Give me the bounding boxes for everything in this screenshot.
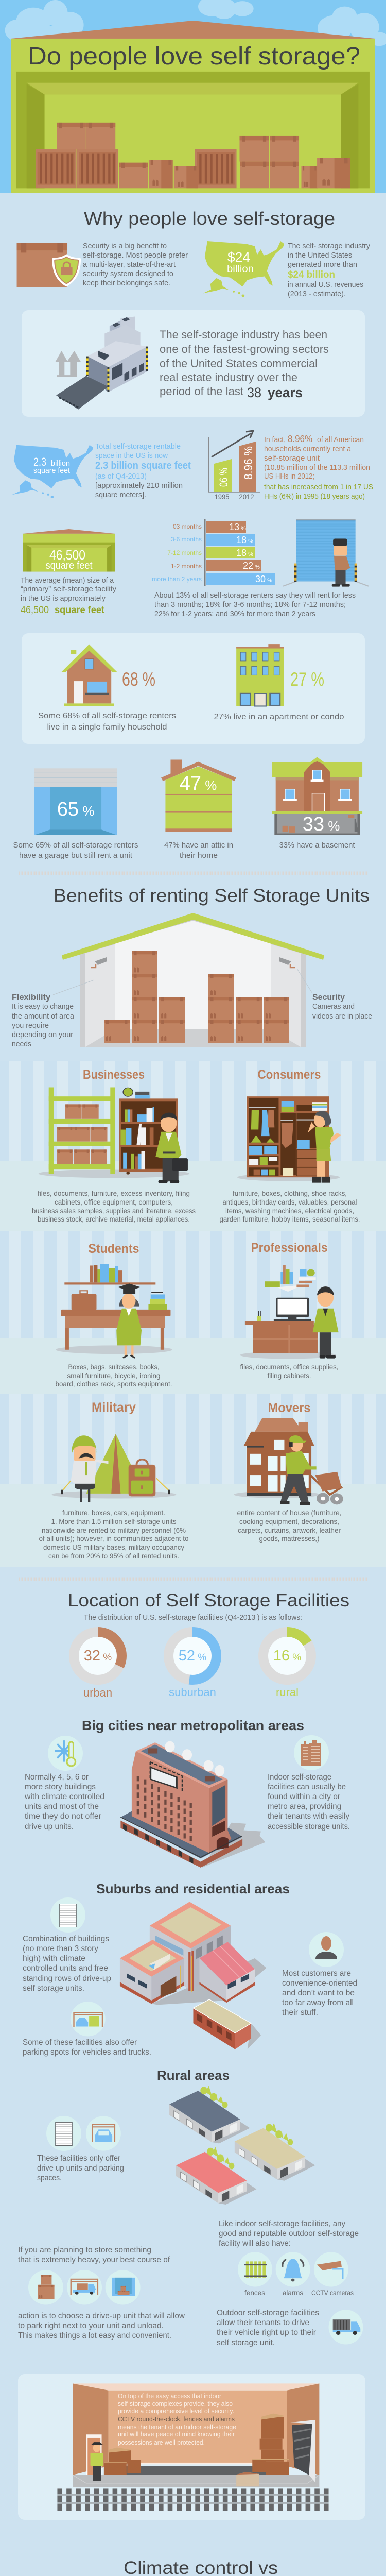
text: drive-up recommendation: action is to choose a drive-up unit that will allow [18,2312,185,2320]
icon: isometric loading facility [56,317,147,410]
icons: fences, alarms, cameras [238,2252,348,2287]
heading: professionals: Professionals [251,1241,327,1255]
text: big cities right: facilities can usually be [268,1783,346,1791]
text: industry revenue: (2013 - estimate). [288,290,346,298]
text: consumers list [219,1189,360,1223]
text: flexibility: you require [12,1022,49,1030]
icon: garage 65% [34,768,117,835]
text: indoor security: provide a comprehensive level of security. [118,2407,234,2415]
icon: roller door [50,1897,85,1933]
icon: house with basement 33% [272,757,362,835]
text: rental durations: than 3 months; 18% for 3-6 months; 18% for 7-12 months; [154,601,346,609]
text: businesses list: business sales samples, supplies and literature, excess [32,1207,196,1215]
icon: blue US map 2.3 billion: billion [51,459,70,468]
illustration: suburban buildings [120,1902,267,2049]
bar chart: households 1995 vs 2012: 1995 [214,493,230,501]
icons: heavy items, truck, unit [28,2270,141,2304]
text: military list: domestic US military bases, military occupancy [43,1543,184,1551]
icon: up arrows [56,351,81,377]
text: outdoor tenants [217,2309,319,2347]
icon: blue US map 2.3 billion [12,445,93,498]
text: industry revenue: in the United States [288,251,352,260]
illustration: rural buildings [169,2086,315,2205]
text: household captions [38,711,344,732]
bar chart: rental duration: 18 % [236,548,253,558]
text: industry revenue [288,242,371,298]
text: outdoor tenants: Outdoor self-storage facilities [217,2309,319,2317]
text: professionals list: files, documents, office supplies, [240,1363,339,1371]
bar chart: rental duration: 18 % [236,535,253,545]
text: heavy items [18,2246,170,2264]
text: outdoor features intro: good and reputable outdoor self-storage [219,2229,359,2238]
text: big cities left: drive up units. [25,1822,74,1831]
text: fastest-growing [160,328,329,400]
text: feature labels: alarms [283,2289,303,2297]
text: outdoor features intro: Like indoor self-storage facilities, any [219,2219,345,2228]
text: 8.96% of households: that has increased from 1 in 17 US [264,483,373,492]
text: suburbs left: (no more than 3 story [23,1944,98,1953]
text: rentable space: square meters]. [95,491,146,499]
bar chart: rental duration: 1-2 months [171,563,202,570]
icon: US map with $24 billion: billion [227,264,254,275]
boxes in the doorway [36,123,350,188]
text: rentable space: Total self-storage rentable [95,443,181,451]
donut: urban 32%: urban [83,1686,112,1699]
text: 8.96% of households: households currently rent a [264,445,352,453]
text: industry revenue: $24 billion [288,269,335,280]
text: suburbs left: Combination of buildings [23,1935,109,1943]
donut: urban 32% [74,1632,121,1699]
text: flexibility: the amount of area [12,1012,75,1021]
donut: suburban 52% [169,1632,216,1699]
text: security: keep their belongings safe. [83,279,170,287]
donut: suburban 52%: suburban [169,1686,216,1699]
text: rural left: These facilities only offer [37,2154,120,2163]
figure: 68%: 68 % [122,669,155,690]
text: industry revenue: The self- storage industry [288,242,371,250]
heading: movers: Movers [268,1401,311,1415]
text: outdoor tenants: their vehicle right up to their [217,2328,316,2337]
text: indoor security: unit will have peace of mind knowing their [118,2430,235,2438]
text: outdoor features intro [219,2219,359,2248]
icon: security cameras [91,957,295,968]
text: suburbs right [282,1969,357,2017]
bar chart: households 1995 vs 2012: 06 % [217,468,230,487]
text: big cities left: more story buildings [25,1783,96,1791]
bar chart: households 1995 vs 2012 [209,431,260,501]
text: flexibility: needs [12,1040,31,1048]
heading: suburbs: Suburbs and residential areas [96,1881,290,1896]
text: students list: Boxes, bags, suitcases, books, [68,1363,160,1371]
icon: apartment block [236,644,284,706]
heading: students: Students [89,1242,139,1256]
text: outdoor features intro: facility will also have: [219,2239,291,2248]
icon: small warehouse 46,500: 46,500 [49,547,85,563]
panel: household type [22,633,365,744]
text: security: a multi-layer, state-of-the-art [83,261,176,269]
text: security: Security is a big benefit to [83,242,167,250]
text: average facility size: “primary” self-storage facility [21,585,117,594]
text: military list: furniture, boxes, cars, equipment. [62,1509,165,1517]
heading: military: Military [92,1400,136,1415]
text: outdoor tenants: allow their tenants to drive [217,2318,309,2327]
text: big cities right: accessible storage units. [268,1822,350,1831]
icon: small warehouse 46,500: square feet [45,560,93,571]
text: consumers list: furniture, boxes, clothing, shoe racks, [233,1189,347,1197]
text: 8.96% of households: (10.85 million of the 113.3 million [264,464,370,472]
text: suburbs parking [23,2038,151,2057]
icon: car in drive-up unit [86,2116,121,2151]
text: storage captions [13,841,355,860]
illustration: consumers wardrobe and woman [237,1096,341,1183]
text: feature labels: CCTV cameras [311,2289,354,2297]
text: movers list: cooking equipment, decorations, [239,1517,339,1526]
text: indoor security: On top of the easy access that indoor [118,2392,222,2400]
text: heavy items: If you are planning to store something [18,2246,151,2255]
text: household captions: 27% live in an apartment or condo [214,713,344,721]
text: storage captions: have a garage but still rent a unit [19,851,133,860]
text: security: Cameras and [312,1003,355,1011]
donut: rural 16%: rural [276,1686,299,1699]
icon: house with basement 33%: 33 % [303,814,340,835]
bar chart: rental duration: more than 2 years [152,575,202,583]
donut: rural 16%: 16 % [273,1648,301,1664]
text: indoor security [118,2392,236,2446]
icon: climate snowflake [48,1736,83,1771]
text: fastest-growing: The self-storage industry has been [160,328,327,341]
icon: car and truck parking [71,2002,106,2036]
text: storage captions: 47% have an attic in [164,841,233,850]
text: indoor security: self-storage complexes provide, they also [118,2400,233,2408]
text: big cities left: Normally 4, 5, 6 or [25,1773,89,1782]
icon: truck [329,2310,363,2345]
text: military list: can be from 20% to 95% of all rented units. [48,1552,179,1560]
text: suburbs right: their stuff. [282,2008,318,2017]
text: professionals list: filing cabinets. [268,1371,311,1380]
striped wall bands [0,1061,386,1567]
title: Do people love self storage? [28,43,360,70]
panel: indoor security room [18,2374,365,2520]
panel: fastest-growing sector [22,310,365,417]
building [11,39,375,193]
text: flexibility: Flexibility [12,992,51,1002]
bar chart: households 1995 vs 2012: 8.96 % [242,446,255,480]
text: suburbs right: convenience-oriented [282,1979,357,1988]
text: movers list: goods, mattresses,) [259,1534,319,1543]
text: big cities right: found within a city or [268,1792,340,1801]
text: fastest-growing: 38 [247,385,261,400]
clouds [5,0,386,46]
text: outdoor tenants: self storage unit. [217,2338,275,2347]
text: suburbs left: high) with climate [23,1954,85,1963]
text: rural left: drive up units and parking [37,2164,124,2173]
text: household captions: Some 68% of all self-storage renters [38,711,176,720]
text: businesses list: business stock, archive material, metal appliances. [38,1215,190,1223]
text: fastest-growing: one of the fastest-growing sectors [160,343,329,355]
roof [11,21,375,39]
text: rental durations: About 13% of all self-storage renters say they will rent for less [154,591,356,600]
text: storage captions: 33% have a basement [279,841,355,850]
donut: rural 16% [264,1632,311,1699]
heading: rural: Rural areas [157,2067,230,2083]
text: rentable space: 2.3 billion square feet [95,460,191,471]
text: 8.96% of households [264,434,373,501]
text: big cities left: with climate controlled [24,1792,104,1801]
text: heavy items: that is extremely heavy, your best course of [18,2256,170,2264]
illustration: room with guard and crates [57,2383,329,2511]
text: movers list [237,1509,342,1543]
text: big cities left [24,1773,104,1831]
text: fastest-growing: real estate industry over the [160,371,297,384]
heading: businesses: Businesses [83,1067,145,1082]
text: suburbs right: too far away from all [282,1998,354,2007]
illustration: professional at desk [240,1265,339,1359]
text: suburbs left: self storage units. [23,1984,84,1993]
icon: attic house 47%: 47 % [180,773,217,794]
text: flexibility: It is easy to change [12,1003,74,1011]
text: rural left: spaces. [37,2174,62,2182]
text: security: self-storage. Most people prefer [83,251,188,260]
bar chart: rental duration: 3-6 months [171,536,202,543]
donut: suburban 52%: 52 % [179,1648,206,1664]
text: professionals list [240,1363,339,1380]
text: businesses list: files, documents, furniture, excess inventory, filing [38,1189,190,1197]
text: rentable space [95,443,191,499]
text: 8.96% of households: HHs (6%) in 1995 (18 years ago) [264,493,365,501]
bar chart: rental duration: 13 % [229,522,246,532]
text: average facility size: The average (mean) size of a [21,577,114,585]
text: suburbs left [23,1935,111,1993]
text: students list [56,1363,172,1388]
text: storage captions: their home [180,851,218,860]
text: 8.96% of households: 8.96% [288,434,312,444]
text: suburbs left: standing rows of drive-up [23,1974,111,1983]
text: drive-up recommendation: to park right next to your unit and unload. [18,2321,164,2330]
text: flexibility: depending on your [12,1031,73,1039]
text: students list: small furniture, bicycle, ironing [67,1371,161,1380]
icon: blue US map 2.3 billion: 2.3 [33,455,46,468]
text: indoor security: means the tenant of an Indoor self-storage [118,2423,236,2431]
text: indoor security: possessions are well protected. [118,2438,205,2446]
text: movers list: entire content of house (furniture, [237,1509,342,1517]
text: big cities right: their tenants with easily [268,1812,349,1821]
text: indoor security: CCTV round-the-clock, fences and alarms [118,2415,235,2423]
text: military list [39,1509,189,1560]
heading: benefits: Benefits of renting Self Storage Units [54,886,370,906]
illustration: isometric city building [120,1741,266,1868]
bar chart: rental duration: 7-12 months [167,549,202,556]
icon: roller door [46,2116,81,2151]
text: suburbs right: and don’t want to be [282,1989,355,1997]
text: average facility size [21,577,117,616]
heading: why people love: Why people love self-storage [84,209,335,229]
icon: single family house [62,645,117,706]
text: storage captions: Some 65% of all self-storage renters [13,841,138,850]
text: businesses list: cabinets, office equipment, computers, [55,1198,173,1206]
text: suburbs parking: Some of these facilities also offer [23,2038,137,2047]
text: household captions: live in a single family household [47,723,167,732]
text: drive-up recommendation: This makes things a lot easy and convenient. [18,2331,171,2340]
text: security [312,992,372,1021]
donut: urban 32%: 32 % [84,1648,112,1664]
text: security [83,242,188,287]
text: 8.96% of households: of all American [317,436,364,444]
text: big cities left: time they do not offer [25,1812,101,1821]
text: feature labels [244,2289,354,2297]
text: security: security system designed to [83,270,173,278]
text: drive-up recommendation [18,2312,185,2340]
text: 8.96% of households: self-storage unit [264,454,320,463]
text: military list: 1. More than 1.5 million self-storage units [51,1517,176,1526]
text: rental durations [154,591,356,618]
illustration: mover with house and dolly [234,1418,343,1505]
text: suburbs parking: parking spots for vehicles and trucks. [23,2048,151,2057]
icon: box with shield [17,243,81,287]
hero: warehouse with title [0,0,386,193]
text: distribution intro: The distribution of U.S. self-storage facilities (Q4-2013 ) is as follows: [84,1614,302,1622]
icon: US map with $24 billion [203,241,284,297]
bar chart: rental duration: 22 % [243,561,260,571]
icon: attic house 47% [162,759,235,832]
illustration: student at desk [56,1264,172,1358]
text: big cities right: Indoor self-storage [268,1773,331,1782]
icon: garage 65%: 65 % [57,799,94,820]
text: security: Security [312,992,345,1002]
text: big cities left: units and most of the [25,1802,99,1811]
text: rural left [37,2154,124,2182]
text: big cities right [268,1773,350,1831]
figure: 27%: 27 % [290,669,324,690]
heading: location: Location of Self Storage Facilities [68,1590,349,1611]
text: average facility size: 46,500 [21,605,49,616]
icon: US map with $24 billion: $24 [227,249,250,265]
bar chart: rental duration: 03 months [173,523,202,530]
text: fastest-growing: of the United States commercial [160,357,318,370]
text: 8.96% of households: US HHs in 2012; [264,472,314,481]
illustration: businesses shelf, bookcase and man [39,1087,189,1183]
text: consumers list: items, washing machines, electrical goods, [225,1207,354,1215]
text: industry revenue: in annual U.S. revenues [288,281,363,289]
text: movers list: carpets, curtains, artwork, leather [238,1526,341,1534]
text: average facility size: square feet [55,605,105,616]
text: flexibility [12,992,75,1048]
text: suburbs right: Most customers are [282,1969,351,1978]
text: big cities right: metro area, providing [268,1802,341,1811]
text: security: videos are in place [312,1012,372,1021]
text: rentable space: (as of Q4-2013) [95,472,147,481]
text: military list: nationwide are rented to military personnel (6% [42,1526,186,1534]
text: students list: board, clothes rack, sports equipment. [56,1380,172,1388]
text: businesses list [32,1189,196,1223]
text: rentable space: [approximately 210 million [95,482,183,490]
text: rentable space: space in the US is now [95,452,168,460]
heading: consumers: Consumers [257,1067,321,1082]
text: consumers list: garden furniture, hobby items, seasonal items. [219,1215,360,1223]
text: military list: of all units); however, in communities adjacent to [39,1534,189,1543]
icon: small warehouse 46,500 [23,529,115,572]
icon: blue US map 2.3 billion: square feet [33,466,71,475]
text: feature labels: fences [244,2289,265,2297]
bar chart: rental duration: 30 % [255,574,272,584]
icon: customer person [309,1932,344,1967]
text: average facility size: in the US is approximately [21,595,106,603]
text: consumers list: antiques, birthday cards, valuables, personal [222,1198,357,1206]
text: 8.96% of households: In fact, [264,436,286,444]
bar chart: households 1995 vs 2012: 2012 [239,493,254,501]
icon: man at roller door [283,520,369,587]
text: fastest-growing: period of the last [160,385,243,398]
illustration: storage house with boxes [62,913,324,1047]
illustration: soldier, tent and backpack [51,1434,176,1502]
bar chart: rental duration [152,519,275,586]
text: rental durations: 22% for 1-2 years; and 30% for more than 2 years [154,610,315,618]
heading: big cities: Big cities near metropolitan areas [82,1718,304,1733]
text: suburbs left: controlled units and free [23,1964,108,1973]
icon: city towers [294,1735,329,1770]
text: industry revenue: generated more than [288,261,357,269]
text: fastest-growing: years [268,385,303,400]
